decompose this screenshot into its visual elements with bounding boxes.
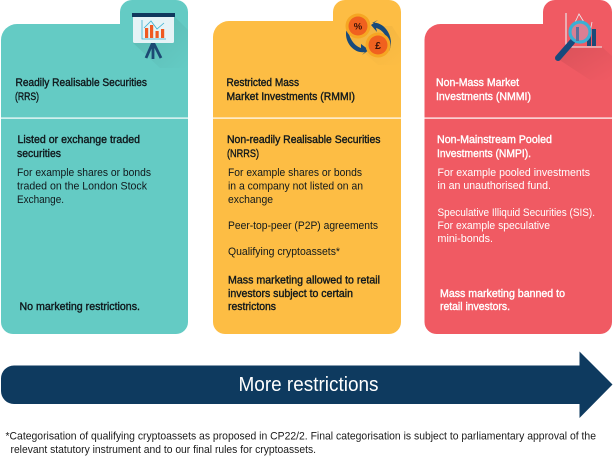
text block: listed securities: Exchange. [17, 194, 64, 206]
text block: NMPI: Non-Mainstream Pooled [437, 134, 552, 146]
footnote: relevant statutory instrument and to our final rules for cryptoassets. [10, 444, 316, 456]
text: mass marketing banned [440, 288, 565, 313]
text block: listed securities [17, 134, 151, 206]
text block: listed securities: For example shares or bonds [17, 167, 151, 179]
arrow: more restrictions [1, 352, 612, 418]
text block: listed securities: traded on the London Stock [17, 180, 147, 192]
footnote [6, 430, 596, 456]
arrow: more restrictions: More restrictions [238, 374, 378, 396]
text block: NRRS: exchange [228, 194, 273, 206]
text: mass marketing allowed: restrictons [228, 301, 276, 313]
text block: NRRS: Qualifying cryptoassets* [228, 246, 341, 258]
footnote: *Categorisation of qualifying cryptoassets as proposed in CP22/2. Final categorisation is subject to parliamentary approval of the [6, 430, 596, 442]
text: mass marketing allowed [228, 274, 380, 313]
text block: NMPI: Speculative Illiquid Securities (SIS). [438, 207, 595, 219]
text block: NRRS: (NRRS) [227, 148, 259, 160]
icon: magnifier over chart [558, 13, 612, 80]
icon: percent and pound exchange [346, 14, 401, 65]
text block: NRRS: Peer-top-peer (P2P) agreements [228, 220, 378, 232]
text block: NRRS: For example shares or bonds [228, 167, 362, 179]
panel: Readily Realisable Securities [1, 0, 188, 334]
heading: RRS: Readily Realisable Securities [16, 77, 147, 89]
text: mass marketing banned: retail investors. [440, 301, 510, 313]
text block: NRRS: Non-readily Realisable Securities [227, 134, 381, 146]
heading: NMMI [436, 77, 531, 103]
text: no marketing restrictions: No marketing restrictions. [20, 301, 140, 313]
icon: presentation board chart [132, 13, 188, 68]
heading: RRS: (RRS) [15, 91, 39, 103]
heading: NMMI: Non-Mass Market [436, 77, 520, 89]
text block: NMPI: For example pooled investments [438, 167, 590, 179]
text block: listed securities: securities [17, 148, 61, 160]
icon part: pound coin: £ [375, 40, 381, 52]
text block: NMPI [437, 134, 595, 245]
heading: NMMI: Investments (NMMI) [436, 91, 531, 103]
text: mass marketing allowed: Mass marketing allowed to retail [228, 274, 380, 286]
text block: listed securities: Listed or exchange traded [18, 134, 140, 146]
panel: Non-Mass Market Investments [424, 0, 612, 334]
text: mass marketing banned: Mass marketing banned to [440, 288, 565, 300]
heading: RMMI: Restricted Mass [226, 77, 299, 89]
text block: NMPI: Investments (NMPI). [437, 148, 531, 160]
text block: NRRS: in a company not listed on an [228, 180, 363, 192]
text block: NMPI: mini-bonds. [438, 233, 493, 245]
text block: NMPI: in an unauthorised fund. [438, 180, 551, 192]
panel: Restricted Mass Market Investments [213, 0, 401, 334]
heading: RMMI [226, 77, 355, 103]
icon part: percent coin: % [354, 22, 363, 32]
text block: NMPI: For example speculative [438, 220, 550, 232]
heading: RRS [15, 77, 147, 103]
text block: NRRS [227, 134, 381, 258]
text: mass marketing allowed: investors subject to certain [228, 288, 353, 300]
heading: RMMI: Market Investments (RMMI) [226, 91, 355, 103]
